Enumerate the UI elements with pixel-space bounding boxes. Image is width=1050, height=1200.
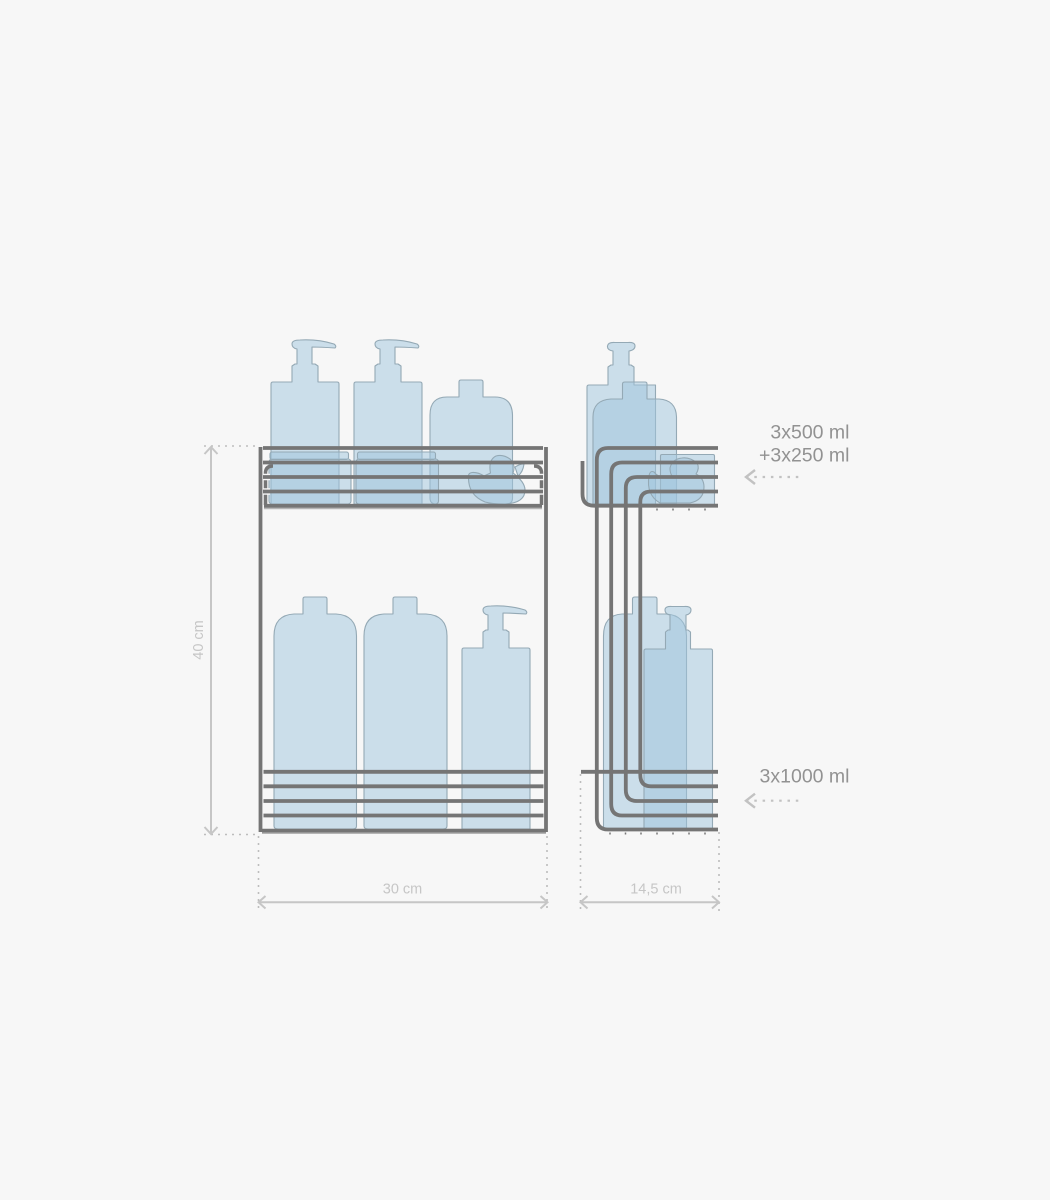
- wire 3: [626, 477, 718, 801]
- callout: lower shelf capacity: [746, 766, 850, 808]
- front upper shelf contents: [269, 340, 525, 504]
- side large bottle: [604, 597, 686, 829]
- pump bottle 1: [271, 340, 339, 504]
- dimension: height 40 cm: [191, 446, 260, 834]
- upper shelf rails: [263, 448, 543, 508]
- front wire frame: [260, 447, 546, 833]
- wire 2: [611, 462, 718, 816]
- lower top rail: [581, 770, 718, 774]
- wire 1: [597, 448, 718, 830]
- rounded bottle: [430, 380, 512, 504]
- depth label: 14,5 cm: [630, 882, 682, 898]
- wire end dots upper: [657, 508, 705, 510]
- side wire frame: [581, 448, 718, 834]
- side pump bottle lower: [644, 606, 712, 829]
- height label: 40 cm: [191, 620, 207, 660]
- wire gaps beside rails: [263, 477, 544, 492]
- large bottle 2: [364, 597, 447, 829]
- side lower shelf contents: [604, 597, 712, 829]
- wire end dots lower: [610, 832, 705, 834]
- icon: rubber duck side: [648, 458, 704, 503]
- side pump bottle: [587, 342, 656, 504]
- left post: [259, 447, 262, 832]
- arrow: points to upper shelf: [746, 470, 803, 484]
- pump bottle 2: [354, 340, 422, 504]
- side rounded bottle: [593, 382, 676, 504]
- width label: 30 cm: [383, 882, 422, 898]
- pump bottle 3: [462, 606, 530, 829]
- capacity text lower: 3x1000 ml: [760, 766, 850, 788]
- right post: [544, 447, 548, 832]
- upper hook and base: [582, 461, 718, 506]
- diagram: side view of shelf: [581, 342, 718, 834]
- front lower shelf contents: [274, 597, 530, 829]
- dimension: depth 14,5 cm: [580, 774, 719, 912]
- callout: upper shelf capacity: [746, 422, 850, 484]
- arrow: points to lower shelf: [746, 794, 803, 808]
- large bottle 1: [274, 597, 356, 829]
- jar 1: [269, 452, 351, 504]
- side upper shelf contents: [587, 342, 714, 505]
- lower shelf rails: [262, 772, 546, 833]
- icon: rubber duck: [468, 455, 525, 504]
- diagram: front view of shelf: [260, 340, 546, 833]
- side jar: [660, 454, 714, 505]
- side wire outlines: [266, 466, 542, 505]
- wire 4: [640, 492, 718, 786]
- dimension: width 30 cm: [258, 836, 548, 912]
- jar 2: [356, 452, 438, 504]
- capacity text: 3x500 ml: [770, 422, 850, 444]
- capacity text second line: +3x250 ml: [759, 444, 850, 466]
